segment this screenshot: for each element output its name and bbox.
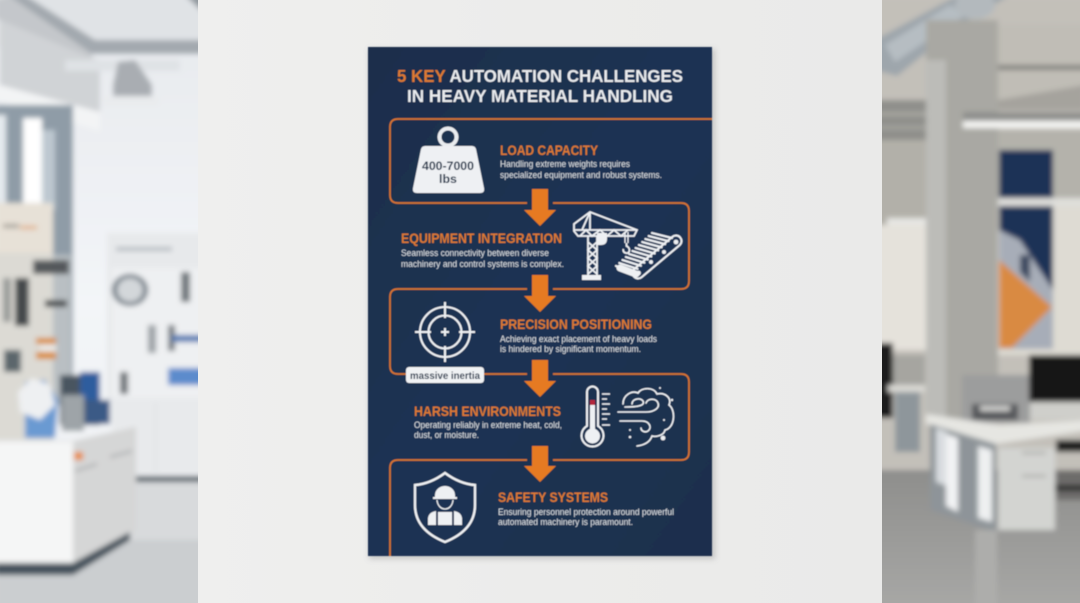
text: equipment integration: EQUIPMENT INTEGRATION [401, 231, 562, 246]
title [397, 66, 683, 106]
icon: thermometer [582, 386, 610, 447]
text: harsh environments: HARSH ENVIRONMENTS [414, 404, 561, 419]
icon: wind and dust cloud [618, 387, 674, 446]
text: load capacity: Handling extreme weights requires [500, 159, 630, 169]
icon: conveyor [616, 233, 678, 275]
poster panel [368, 47, 712, 556]
icon: weight: 400-7000 [422, 159, 474, 173]
text: harsh environments: dust, or moisture. [414, 430, 479, 440]
icon: crane [574, 212, 637, 280]
text: precision positioning: is hindered by significant momentum. [500, 344, 641, 354]
text: safety systems: Ensuring personnel protection around powerful [498, 507, 674, 517]
text: equipment integration [401, 231, 564, 269]
text: equipment integration: Seamless connectivity between diverse [401, 248, 549, 258]
text: precision positioning: Achieving exact placement of heavy loads [500, 334, 657, 344]
text: safety systems [498, 490, 674, 527]
arrow 4 [524, 446, 556, 482]
background: white wall [198, 0, 882, 603]
text: precision positioning [500, 317, 657, 354]
text: safety systems: automated machinery is paramount. [498, 517, 633, 527]
text: load capacity: specialized equipment and robust systems. [500, 170, 662, 180]
text: precision positioning: PRECISION POSITIONING [500, 317, 652, 332]
title: 5 KEY AUTOMATION CHALLENGES [397, 66, 683, 86]
text: load capacity: LOAD CAPACITY [500, 143, 598, 158]
icon: safety shield [415, 473, 475, 542]
arrow 3 [524, 360, 556, 397]
title: IN HEAVY MATERIAL HANDLING [407, 86, 673, 106]
background: blurred lab room left [0, 0, 205, 603]
background: blurred office right [875, 0, 1080, 603]
callout: massive inertia [406, 367, 484, 383]
text: harsh environments: Operating reliably in extreme heat, cold, [414, 420, 562, 430]
text: harsh environments [414, 404, 562, 440]
icon: weight [413, 128, 484, 193]
icon: weight: lbs [439, 172, 457, 186]
flow frames: orange connector outlines [390, 119, 712, 556]
arrow 1 [524, 189, 556, 226]
icon: target [415, 302, 475, 362]
text: load capacity [500, 143, 662, 180]
text: equipment integration: machinery and control systems is complex. [401, 259, 564, 269]
poster shadow [369, 49, 715, 559]
callout: massive inertia: massive inertia [410, 370, 480, 382]
text: safety systems: SAFETY SYSTEMS [498, 490, 608, 505]
arrow 2 [524, 275, 556, 312]
